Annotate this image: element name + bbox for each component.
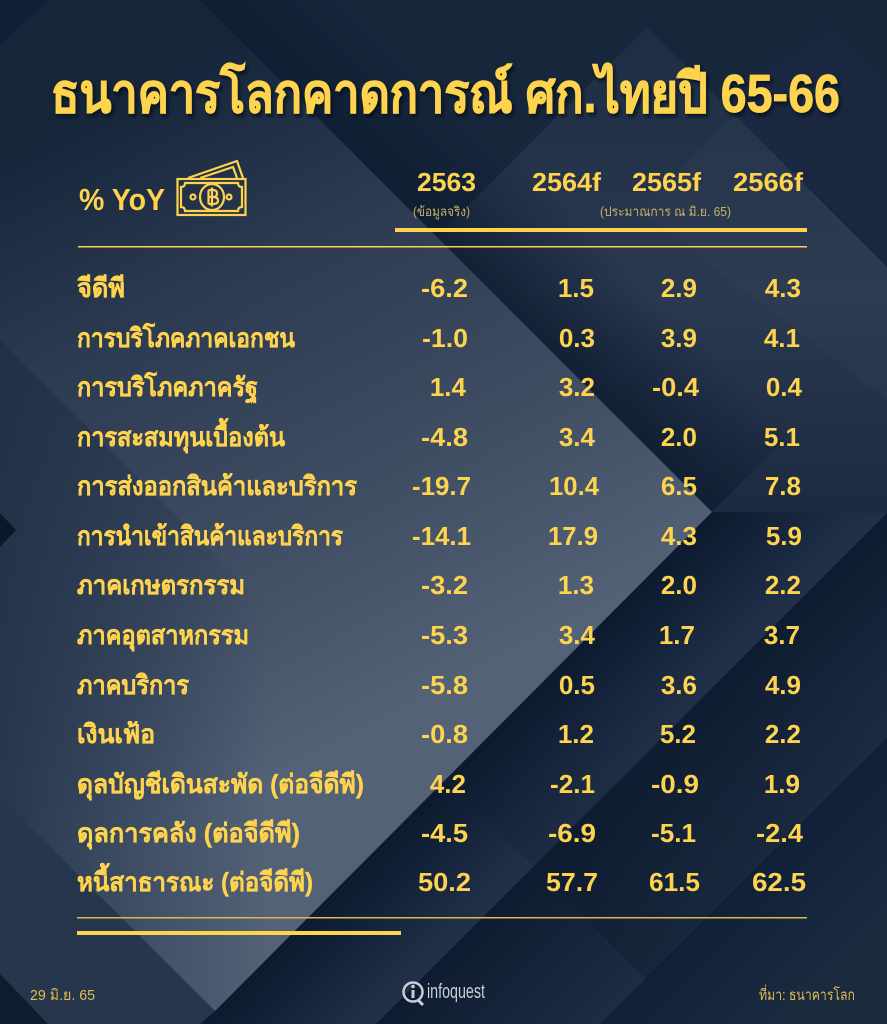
table column 2565f: 2.9 — [661, 273, 697, 303]
table column 2564f: -6.9 — [548, 818, 596, 848]
table column 2565f: 2.0 — [661, 570, 697, 600]
table column 2563: -0.8 — [421, 719, 468, 749]
column headers: 2564f — [532, 167, 601, 197]
footer source: ที่มา: ธนาคารโลก — [759, 984, 855, 1004]
table column 2566f: -2.4 — [756, 818, 804, 848]
table column 2564f: 1.5 — [558, 273, 594, 303]
table column 2565f: 3.6 — [661, 670, 697, 700]
table column 2566f: 4.3 — [765, 273, 801, 303]
header: % YoY: % YoY — [79, 182, 165, 217]
table column 2566f: 7.8 — [765, 471, 801, 501]
table column 2564f: 57.7 — [546, 867, 598, 897]
table row labels: การส่งออกสินค้าและบริการ — [77, 471, 357, 501]
table column 2563 — [412, 273, 471, 897]
table column 2566f: 5.9 — [766, 521, 802, 551]
table column 2566f: 5.1 — [764, 422, 800, 452]
table row labels: ภาคเกษตรกรรม — [77, 570, 245, 600]
table column 2566f: 4.1 — [764, 323, 800, 353]
table column 2563: -3.2 — [421, 570, 468, 600]
table row labels: จีดีพี — [77, 273, 125, 303]
column headers: 2566f — [733, 167, 803, 197]
logo: infoquest — [404, 981, 485, 1005]
table column 2564f: 17.9 — [548, 521, 598, 551]
table column 2564f: 3.2 — [559, 372, 595, 402]
table column 2563: -4.8 — [421, 422, 468, 452]
table column 2564f: 1.3 — [558, 570, 594, 600]
table column 2565f: 4.3 — [661, 521, 697, 551]
table column 2564f: 0.5 — [559, 670, 595, 700]
table column 2566f: 3.7 — [764, 620, 800, 650]
table column 2563: 4.2 — [430, 769, 466, 799]
logo: infoquest: infoquest — [427, 981, 485, 1003]
table column 2565f: 6.5 — [661, 471, 697, 501]
icon: banknotes — [178, 161, 246, 215]
table row labels: การนำเข้าสินค้าและบริการ — [77, 521, 343, 551]
table column 2563: -4.5 — [421, 818, 468, 848]
table column 2564f: 3.4 — [559, 620, 596, 650]
table column 2563: -5.8 — [421, 670, 468, 700]
table row labels: การสะสมทุนเบื้องต้น — [77, 417, 285, 454]
note: actual data: (ข้อมูลจริง) — [413, 204, 470, 220]
table column 2564f: 3.4 — [559, 422, 596, 452]
table column 2563: -19.7 — [412, 471, 471, 501]
table column 2563: 1.4 — [430, 372, 467, 402]
table column 2564f: -2.1 — [550, 769, 595, 799]
table column 2563: -1.0 — [422, 323, 468, 353]
table column 2565f: -5.1 — [651, 818, 696, 848]
table column 2566f — [752, 273, 806, 897]
table column 2565f: 61.5 — [649, 867, 700, 897]
table row labels: การบริโภคภาครัฐ — [77, 371, 258, 405]
note: estimates: (ประมาณการ ณ มิ.ย. 65) — [600, 204, 731, 219]
column headers: 2565f — [632, 167, 701, 197]
column headers — [417, 167, 803, 197]
table row labels: การบริโภคภาคเอกชน — [77, 322, 295, 353]
table row labels: ดุลการคลัง (ต่อจีดีพี) — [77, 818, 300, 850]
table row labels: หนี้สาธารณะ (ต่อจีดีพี) — [77, 862, 313, 897]
table column 2566f: 4.9 — [765, 670, 801, 700]
table column 2565f: -0.9 — [651, 769, 699, 799]
footer date: 29 มิ.ย. 65 — [30, 987, 95, 1004]
table column 2566f: 0.4 — [766, 372, 803, 402]
table column 2565f: 5.2 — [660, 719, 696, 749]
table column 2564f: 0.3 — [559, 323, 595, 353]
table column 2564f: 10.4 — [549, 471, 600, 501]
table column 2564f — [546, 273, 600, 897]
table column 2563: -6.2 — [421, 273, 468, 303]
table column 2565f — [649, 273, 700, 897]
table column 2565f: 2.0 — [661, 422, 697, 452]
table row labels: เงินเฟ้อ — [77, 719, 155, 749]
table column 2566f: 62.5 — [752, 867, 806, 897]
table row labels: ภาคอุตสาหกรรม — [77, 620, 249, 652]
table column 2565f: 3.9 — [661, 323, 697, 353]
table column 2565f: 1.7 — [659, 620, 695, 650]
column headers: 2563 — [417, 167, 476, 197]
table column 2563: 50.2 — [418, 867, 471, 897]
table column 2563: -5.3 — [421, 620, 468, 650]
table row labels: ดุลบัญชีเดินสะพัด (ต่อจีดีพี) — [77, 769, 364, 801]
table row labels — [77, 273, 364, 897]
table row labels: ภาคบริการ — [77, 670, 189, 700]
table column 2564f: 1.2 — [558, 719, 594, 749]
table column 2563: -14.1 — [412, 521, 471, 551]
table column 2566f: 2.2 — [765, 719, 801, 749]
table column 2566f: 2.2 — [765, 570, 801, 600]
table column 2565f: -0.4 — [652, 372, 700, 402]
table column 2566f: 1.9 — [764, 769, 800, 799]
